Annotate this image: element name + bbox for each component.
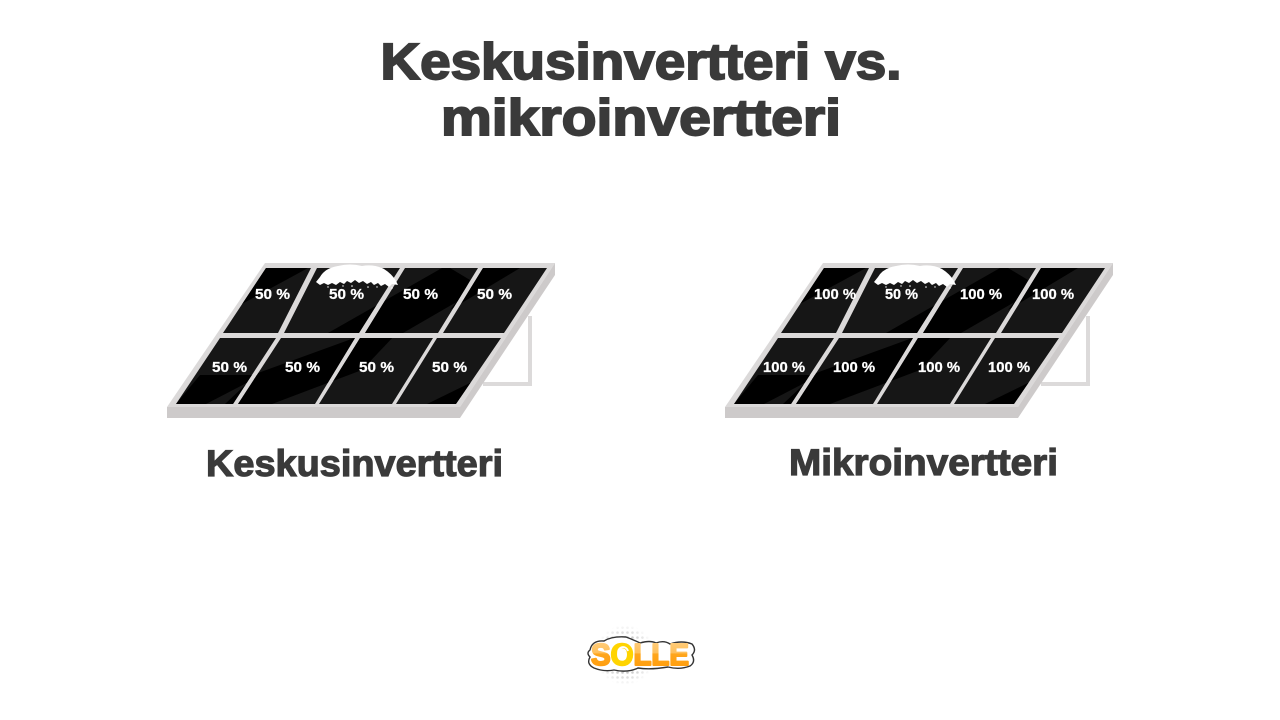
- percentage labels: 50 %: [285, 360, 320, 376]
- title: Keskusinvertteri vs.: [380, 33, 902, 90]
- percentage labels: 100 %: [988, 360, 1030, 376]
- panel: mikroinvertteri solar panel: [725, 263, 1113, 418]
- shade splatter: [316, 264, 398, 289]
- percentage labels: 50 %: [403, 287, 438, 303]
- panel: keskusinvertteri solar panel: [167, 263, 555, 418]
- logo: Solle: [588, 625, 694, 685]
- heading: keskusinvertteri: Keskusinvertteri: [206, 443, 503, 484]
- percentage labels: 100 %: [763, 360, 805, 376]
- heading: mikroinvertteri: Mikroinvertteri: [789, 442, 1058, 483]
- percentage labels: 50 %: [432, 360, 467, 376]
- logo wordmark: SOLLE: [591, 637, 689, 672]
- percentage labels: 100 %: [1032, 287, 1074, 303]
- percentage labels: 50 %: [212, 360, 247, 376]
- panel frame: [725, 263, 1113, 418]
- percentage labels: 50 %: [885, 287, 918, 303]
- percentage labels: [763, 287, 1074, 376]
- solar cells: [728, 265, 1108, 407]
- percentage labels: 50 %: [329, 287, 364, 303]
- logo outline: [588, 637, 694, 671]
- percentage labels: [212, 287, 512, 376]
- percentage labels: 100 %: [960, 287, 1002, 303]
- percentage labels: 50 %: [359, 360, 394, 376]
- percentage labels: 50 %: [255, 287, 290, 303]
- percentage labels: 100 %: [833, 360, 875, 376]
- halftone dots: [602, 627, 648, 683]
- logo spiral: [618, 647, 628, 657]
- panel stand: [483, 316, 530, 384]
- panel stand: [1041, 316, 1088, 384]
- percentage labels: 100 %: [814, 287, 856, 303]
- title: [380, 33, 902, 146]
- percentage labels: 100 %: [918, 360, 960, 376]
- panel frame: [167, 263, 555, 418]
- percentage labels: 50 %: [477, 287, 512, 303]
- title: mikroinvertteri: [441, 89, 841, 146]
- shade splatter: [874, 264, 956, 289]
- solar cells: [170, 265, 550, 407]
